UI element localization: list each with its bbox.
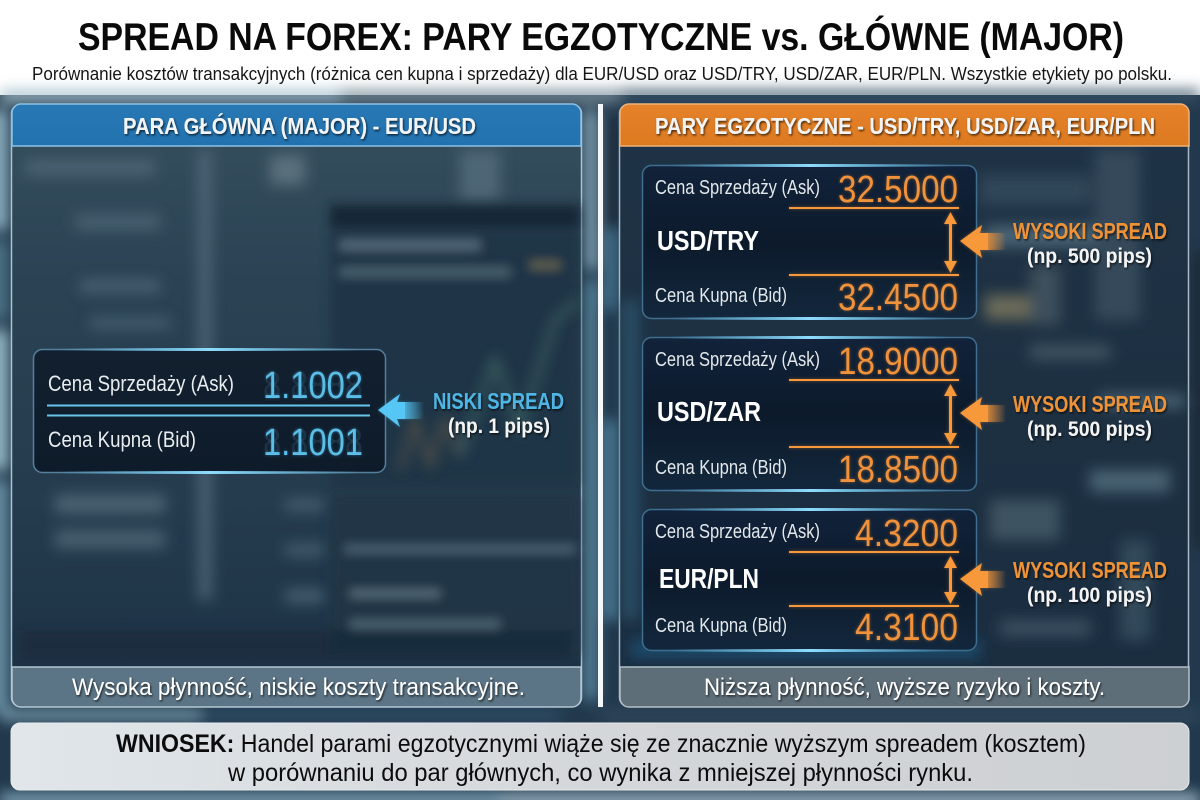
ask price: 32.5000 [838, 169, 958, 211]
bid price: 4.3100 [855, 607, 958, 649]
label: high spread USD/TRY: (np. 500 pips) [1027, 244, 1152, 268]
bid price: 1.1001 [263, 422, 363, 464]
ask label: Cena Sprzedaży (Ask) [655, 176, 820, 199]
bid price: 18.8500 [838, 449, 958, 491]
ask price: 1.1002 [263, 365, 363, 407]
label: high spread USD/ZAR [1013, 391, 1167, 441]
white title band [0, 0, 1200, 95]
centre divider [598, 104, 603, 707]
bid label: Cena Kupna (Bid) [655, 456, 787, 479]
bid price: 8.8888 [263, 422, 363, 464]
bid label: Cena Kupna (Bid) [48, 427, 196, 452]
bid label: Cena Kupna (Bid) [655, 284, 787, 307]
spread lines [47, 404, 370, 416]
conclusion box [11, 723, 1189, 790]
ask price: 8.8888 [263, 365, 363, 407]
ask label: Cena Sprzedaży (Ask) [48, 371, 234, 396]
panel footer: Niższa płynność, wyższe ryzyko i koszty. [704, 674, 1105, 701]
spread lines and double arrow [789, 379, 959, 448]
label: high spread EUR/PLN: (np. 100 pips) [1027, 583, 1152, 607]
pair name: EUR/PLN [659, 563, 759, 594]
pair name: USD/ZAR [657, 396, 761, 427]
spread lines and double arrow [789, 207, 959, 276]
arrow: high spread EUR/PLN [960, 563, 1006, 596]
ask price: 18.9000 [838, 341, 958, 383]
panel: major pair [12, 104, 582, 707]
panel: exotic pairs [620, 104, 1189, 707]
panel footer: Wysoka płynność, niskie koszty transakcyjne. [72, 674, 525, 701]
bid label: Cena Kupna (Bid) [655, 614, 787, 637]
arrow: low spread [378, 394, 424, 427]
label: high spread EUR/PLN [1013, 557, 1167, 607]
label: high spread USD/TRY [1013, 218, 1167, 268]
label: high spread USD/ZAR: (np. 500 pips) [1027, 417, 1152, 441]
panel header: PARA GŁÓWNA (MAJOR) - EUR/USD [123, 112, 476, 139]
panel header [620, 104, 1189, 146]
card: USD/ZAR [642, 336, 976, 492]
label: low spread: NISKI SPREAD [433, 388, 564, 414]
arrow: high spread USD/TRY [960, 225, 1006, 258]
card: EUR/PLN [642, 508, 976, 652]
panel footer [12, 667, 581, 707]
bid price: 32.4500 [838, 277, 958, 319]
conclusion box: w porównaniu do par głównych, co wynika z mniejszej płynności rynku. [227, 759, 973, 787]
pair name: USD/TRY [657, 225, 759, 256]
label: low spread: (np. 1 pips) [448, 414, 550, 438]
blurred background inside right panel [622, 150, 1185, 658]
panel footer [620, 667, 1189, 707]
card: USD/TRY [642, 164, 976, 320]
card: EUR/USD quote [34, 348, 386, 474]
panel header [12, 104, 581, 146]
blurred chart trace [400, 300, 578, 470]
ask price: 4.3200 [855, 513, 958, 555]
arrow: high spread USD/ZAR [960, 397, 1006, 430]
conclusion box: WNIOSEK: Handel parami egzotycznymi wiąże się ze znacznie wyższym spreadem (kosztem) [116, 730, 1086, 758]
blurred dashboard inside left panel [20, 150, 580, 660]
spread lines and double arrow [789, 551, 959, 607]
ask label: Cena Sprzedaży (Ask) [655, 520, 820, 543]
ask label: Cena Sprzedaży (Ask) [655, 348, 820, 371]
label: low spread [433, 388, 564, 438]
